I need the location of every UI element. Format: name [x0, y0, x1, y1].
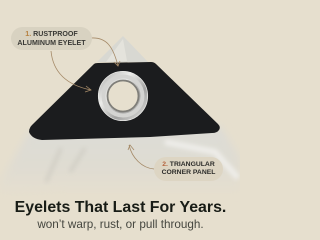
- arrow: callout 2 to panel: [128, 145, 154, 169]
- callout 1 text: [17, 30, 86, 47]
- callout 2 text: [162, 160, 216, 176]
- tarp sheet: [0, 36, 240, 198]
- callout 1 text: 1. RUSTPROOF: [25, 30, 78, 38]
- callout 1: rustproof aluminum eyelet: [11, 27, 92, 50]
- callout 2 text: 2. TRIANGULAR: [162, 160, 215, 168]
- callout 2 text: CORNER PANEL: [162, 169, 215, 176]
- title: Eyelets That Last For Years.: [15, 199, 226, 216]
- product illustration: tarp corner with eyelet: [28, 36, 240, 182]
- subtitle: won’t warp, rust, or pull through.: [37, 218, 204, 231]
- callout 2: triangular corner panel: [154, 157, 223, 181]
- aluminum eyelet: [98, 71, 148, 121]
- arrow: callout 1 to eyelet: [51, 38, 120, 92]
- triangular corner panel: [29, 62, 220, 140]
- callout 1 text: ALUMINUM EYELET: [17, 39, 86, 47]
